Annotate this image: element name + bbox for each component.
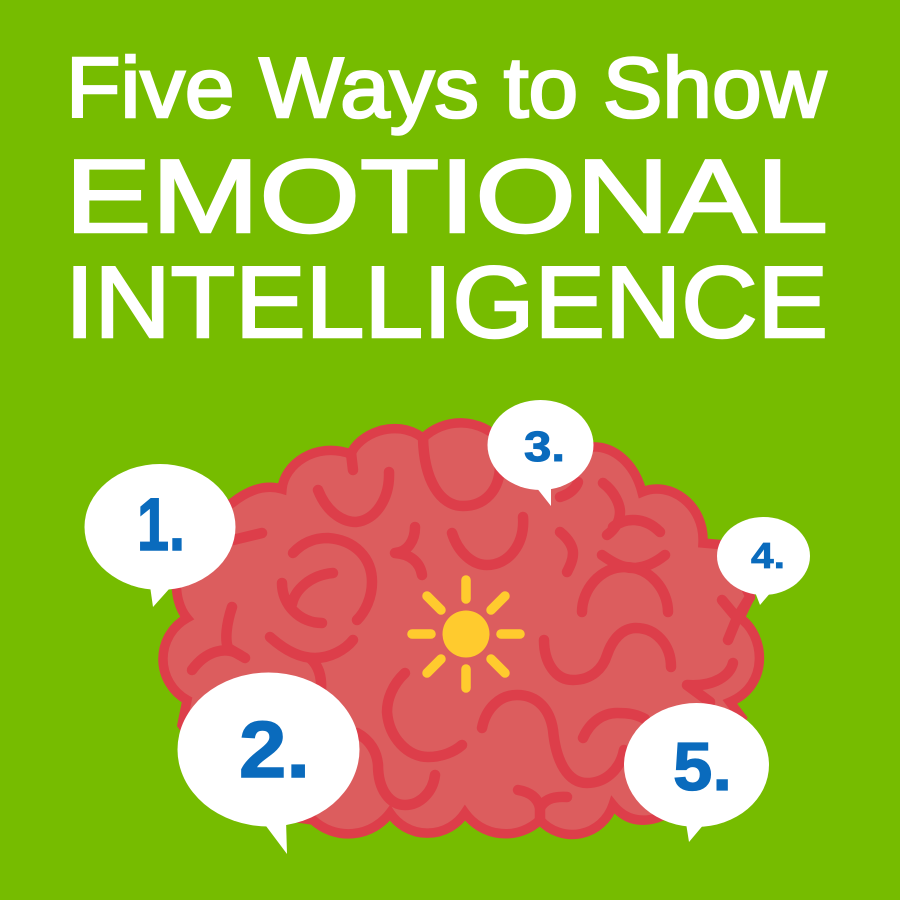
- speech bubble 1: [84, 464, 236, 607]
- speech bubble 1: 1.: [137, 483, 185, 566]
- brain folds: [192, 438, 750, 820]
- speech bubble 3: [488, 400, 594, 506]
- brain outline: [163, 423, 759, 834]
- speech bubble 3: 3.: [524, 423, 565, 471]
- title: EMOTIONAL: [65, 139, 828, 255]
- title: [65, 41, 828, 359]
- brain illustration: [163, 423, 759, 834]
- speech bubble 2: 2.: [239, 705, 310, 794]
- speech bubble 5: 5.: [673, 729, 732, 805]
- title: Five Ways to Show: [66, 41, 827, 136]
- speech bubble 5: [624, 703, 769, 842]
- speech bubble 2: [178, 672, 360, 854]
- icon: sun: [412, 580, 520, 688]
- speech bubble 4: 4.: [751, 535, 785, 576]
- title: INTELLIGENCE: [65, 247, 828, 359]
- speech bubble 4: [717, 517, 810, 605]
